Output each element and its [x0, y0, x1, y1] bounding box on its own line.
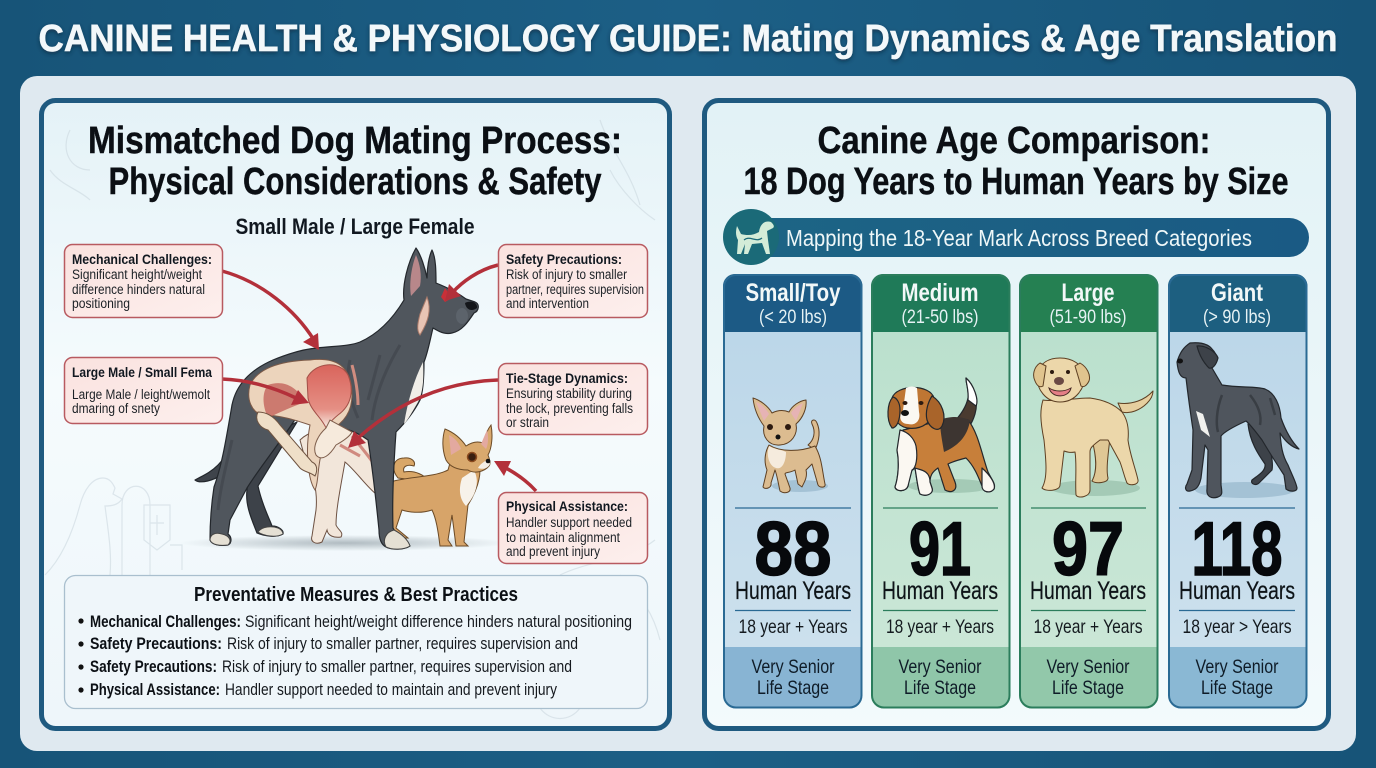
life stage: Life Stage	[1052, 677, 1124, 699]
life stage: Very Senior	[898, 656, 982, 678]
banner: mapping the 18-year mark	[723, 209, 1309, 265]
header text: giant: (> 90 lbs)	[1203, 307, 1271, 328]
callout: safety precautions	[498, 244, 648, 318]
arrow: mechanical challenges	[222, 271, 319, 350]
header text: small/toy	[746, 279, 841, 328]
life stage: Life Stage	[904, 677, 976, 699]
bullet: physical assistance	[78, 680, 557, 699]
callout: physical assistance: Physical Assistance:	[506, 498, 628, 514]
card: medium	[871, 274, 1010, 708]
great dane tail	[195, 405, 244, 482]
callout: safety precautions: Risk of injury to smaller	[506, 267, 627, 282]
hind anatomy overlay	[249, 359, 352, 490]
callout: large male small female	[64, 358, 222, 424]
caption: 18 year plus years: 18 year + Years	[1034, 616, 1143, 638]
bullet: physical assistance: Physical Assistance:	[90, 680, 220, 699]
callout: tie-stage dynamics: Ensuring stability during	[506, 386, 632, 401]
header text: medium: (21-50 lbs)	[902, 307, 978, 328]
callout: mechanical challenges: Mechanical Challenges:	[72, 251, 212, 267]
caption: 18 year greater than years	[1179, 610, 1295, 638]
chihuahua tail and body	[394, 458, 429, 482]
arrow: physical assistance	[494, 461, 536, 491]
life stage: Very Senior	[1196, 656, 1279, 678]
dog: great dane	[1177, 343, 1299, 498]
panel: preventative measures	[64, 576, 648, 708]
caption: 18 year plus years	[883, 610, 998, 638]
life stage: Very Senior	[1046, 656, 1130, 678]
header text: small/toy: Small/Toy	[746, 279, 841, 307]
life stage	[752, 656, 835, 699]
life stage: Life Stage	[1201, 677, 1273, 699]
caption: 18 year plus years	[735, 610, 851, 638]
callout: large male small female: Large Male / Small Fema	[72, 364, 212, 380]
arrow: tie-stage dynamics	[348, 380, 498, 448]
bullet: mechanical challenges	[78, 612, 632, 631]
header text: medium	[902, 279, 978, 328]
callout: mechanical challenges: Significant height/weight	[72, 267, 202, 282]
heading: right panel title: Canine Age Comparison:	[818, 120, 1210, 162]
bullet: safety precautions repeat	[78, 657, 572, 676]
subheading: Small Male / Large Female	[236, 214, 474, 239]
callout: tie-stage dynamics: Tie-Stage Dynamics:	[506, 370, 628, 386]
dog: chihuahua	[753, 398, 828, 493]
decorative background sketches	[45, 120, 660, 718]
pale female rear body	[300, 429, 392, 543]
callout: mechanical challenges	[64, 244, 222, 318]
bullet: safety precautions repeat: Risk of injury to smaller partner, requires supervision and	[222, 657, 572, 676]
callout: safety precautions: partner, requires supervision	[506, 282, 644, 297]
arrow: safety precautions	[445, 265, 498, 301]
caption: 18 year plus years: 18 year + Years	[886, 616, 994, 638]
callout: mechanical challenges: positioning	[72, 296, 130, 311]
life stage: Life Stage	[757, 677, 829, 699]
header text: large: Large	[1062, 279, 1115, 307]
callout: large male small female: dmaring of snety	[72, 401, 160, 416]
bullet: mechanical challenges: Mechanical Challenges:	[90, 612, 241, 631]
card: giant	[1168, 274, 1308, 708]
life stage	[898, 656, 982, 699]
preventative heading: Preventative Measures & Best Practices	[194, 584, 518, 606]
divider and number 118: 118	[1192, 507, 1282, 592]
caption: 18 year plus years: 18 year + Years	[738, 616, 848, 638]
callout: large male small female: Large Male / leight/wemolt	[72, 387, 210, 402]
callout: tie-stage dynamics: the lock, preventing falls	[506, 401, 633, 416]
card: large	[1019, 274, 1158, 708]
illustration: mismatched dogs with anatomy	[180, 248, 510, 551]
header text: medium: Medium	[902, 279, 978, 307]
callout: physical assistance: to maintain alignment	[506, 530, 620, 545]
banner: mapping the 18-year mark: Mapping the 18-Year Mark Across Breed Categories	[786, 225, 1252, 251]
heading: left panel title	[88, 120, 622, 203]
life stage	[1046, 656, 1130, 699]
callout: physical assistance	[498, 492, 648, 564]
panel: mismatched dog mating process	[42, 100, 670, 728]
neck anatomy	[418, 297, 429, 335]
life stage: Very Senior	[752, 656, 835, 678]
label: human years: Human Years	[1030, 577, 1146, 605]
divider and number 88: 88	[754, 507, 832, 592]
callout: tie-stage dynamics: or strain	[506, 415, 549, 430]
bullet: safety precautions: Risk of injury to smaller partner, requires supervision and	[227, 634, 578, 653]
callout: tie-stage dynamics	[498, 364, 648, 434]
divider and number 97: 97	[1052, 507, 1124, 592]
caption: 18 year plus years	[1031, 610, 1146, 638]
life stage	[1196, 656, 1279, 699]
arrow: large male small female	[222, 379, 309, 405]
bullet: mechanical challenges: Significant height/weight difference hinders natural positioning	[245, 612, 632, 631]
callout: physical assistance: and prevent injury	[506, 544, 600, 559]
callout: mechanical challenges: difference hinders natural	[72, 282, 205, 297]
bullet: safety precautions repeat: Safety Precautions:	[90, 657, 217, 676]
callout: safety precautions: and intervention	[506, 296, 589, 311]
dog: beagle	[888, 378, 995, 495]
label: human years: Human Years	[882, 577, 998, 605]
divider and number 91: 91	[909, 507, 971, 592]
header text: large	[1050, 279, 1126, 328]
heading: left panel title: Mismatched Dog Mating Process:	[88, 120, 622, 162]
header text: small/toy: (< 20 lbs)	[759, 307, 827, 328]
header text: large: (51-90 lbs)	[1050, 307, 1126, 328]
callout: safety precautions: Safety Precautions:	[506, 251, 622, 267]
header text: giant	[1203, 279, 1271, 328]
icon: dog in circle	[723, 209, 779, 265]
bullet: safety precautions	[78, 634, 578, 653]
caption: 18 year greater than years: 18 year > Years	[1182, 616, 1292, 638]
callout: physical assistance: Handler support needed	[506, 515, 632, 530]
great dane far hind leg	[247, 422, 297, 536]
heading: right panel title	[744, 120, 1288, 203]
bullet: safety precautions: Safety Precautions:	[90, 634, 222, 653]
header text: giant: Giant	[1211, 279, 1264, 307]
dog: labrador	[1034, 358, 1153, 497]
heading: left panel title: Physical Considerations & Safety	[108, 161, 602, 203]
bullet: physical assistance: Handler support needed to maintain and prevent injury	[225, 680, 557, 699]
great dane body	[210, 248, 478, 549]
panel: canine age comparison	[704, 100, 1328, 728]
label: human years: Human Years	[735, 577, 851, 605]
label: human years: Human Years	[1179, 577, 1295, 605]
card: small/toy	[723, 274, 862, 708]
